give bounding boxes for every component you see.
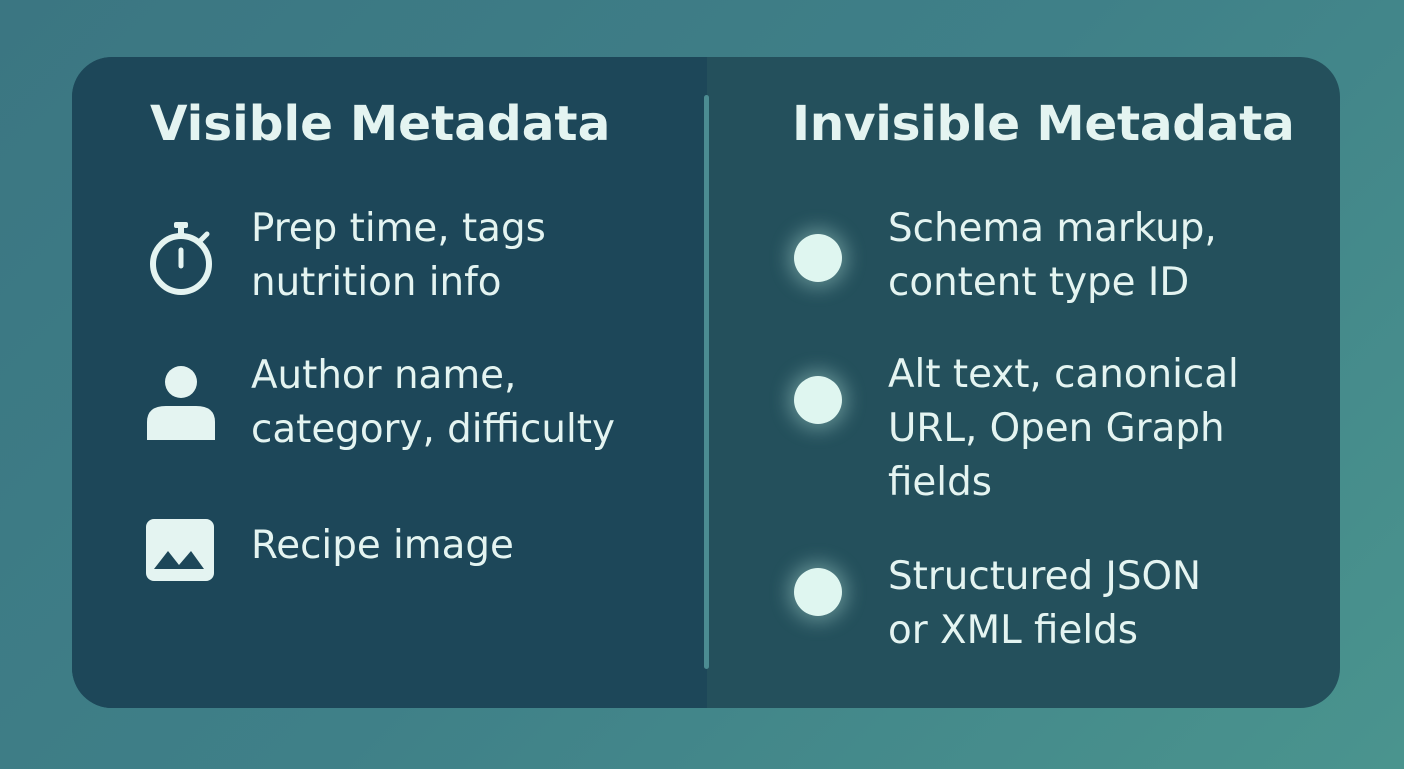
text: alt text: fields [888,460,992,505]
divider [704,95,709,669]
text: author [251,353,615,452]
text: alt text: Alt text, canonical [888,352,1239,397]
heading: invisible metadata: Invisible Metadata [792,96,1294,152]
text: prep time: Prep time, tags [251,206,546,251]
text: prep time [251,206,546,305]
text: recipe image: Recipe image [251,523,514,568]
icon: person [147,366,215,440]
text: schema: content type ID [888,260,1189,305]
panel: metadata comparison [72,57,1340,708]
icon: image [146,519,214,581]
text: structured: or XML fields [888,608,1138,653]
icon: dot 3 [794,568,842,616]
text: schema [888,206,1217,305]
text: alt text: URL, Open Graph [888,406,1225,451]
text: structured [888,554,1201,653]
icon: dot 2 [794,376,842,424]
text: author: category, difficulty [251,407,615,452]
icon: dot 1 [794,234,842,282]
panel: visible side background [72,57,707,708]
heading: visible metadata: Visible Metadata [150,96,610,152]
text: alt text [888,352,1239,505]
icon: stopwatch [150,222,212,295]
text: author: Author name, [251,353,516,398]
text: structured: Structured JSON [888,554,1201,599]
text: schema: Schema markup, [888,206,1217,251]
text: prep time: nutrition info [251,260,502,305]
